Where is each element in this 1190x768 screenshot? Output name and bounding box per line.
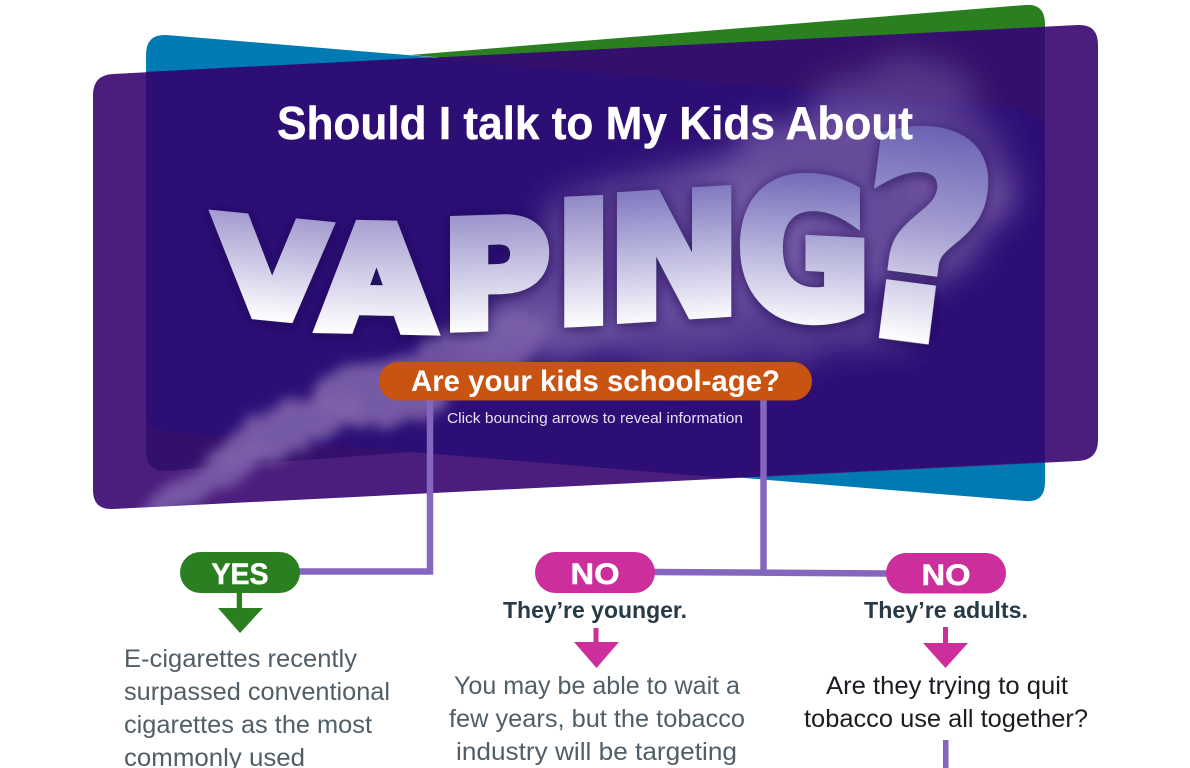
question pill: Are your kids school-age?	[411, 365, 780, 398]
yes body text: E-cigarettes recently	[124, 645, 358, 673]
younger body text: industry will be targeting	[456, 738, 737, 766]
instruction text: Click bouncing arrows to reveal information	[447, 410, 743, 427]
title: Should I talk to My Kids About	[277, 97, 913, 149]
VAPING? headline: N	[608, 158, 740, 359]
green back panel	[410, 5, 1045, 108]
younger body text	[449, 672, 745, 766]
adults question text: Are they trying to quit	[826, 672, 1068, 700]
adults question text: tobacco use all together?	[804, 705, 1088, 733]
yes branch	[124, 552, 390, 768]
no pill: adults: NO	[922, 559, 970, 592]
connector lines	[298, 400, 888, 574]
younger branch	[449, 552, 745, 766]
VAPING? headline: A	[320, 197, 433, 363]
VAPING? headline	[216, 74, 1011, 411]
adults question text	[804, 672, 1088, 733]
yes body text	[124, 645, 390, 768]
yes body text: surpassed conventional	[124, 678, 390, 706]
vapor smoke	[136, 59, 1015, 529]
overlap with blue panel	[146, 58, 1045, 478]
younger body text: few years, but the tobacco	[449, 705, 745, 733]
blue back panel	[146, 35, 1045, 501]
overlap with green panel	[146, 27, 1045, 471]
connector continuing down	[943, 740, 948, 768]
smoke trail	[138, 309, 546, 508]
banner background	[93, 5, 1098, 509]
VAPING? headline: P	[442, 189, 550, 363]
VAPING? headline: I	[553, 166, 614, 365]
adults branch	[804, 553, 1088, 768]
no pill: younger	[535, 552, 655, 593]
younger body text: You may be able to wait a	[454, 672, 740, 700]
they're younger label: They’re younger.	[503, 597, 687, 623]
arrow: younger	[574, 628, 619, 668]
arrow: adults	[923, 627, 968, 668]
they're adults label: They’re adults.	[864, 597, 1028, 623]
VAPING? headline: V	[216, 190, 328, 353]
VAPING? headline: G	[738, 142, 871, 362]
no pill: younger: NO	[570, 558, 620, 591]
no pill: adults	[886, 553, 1006, 594]
yes body text: cigarettes as the most	[124, 711, 372, 739]
yes pill	[180, 552, 300, 593]
purple front panel	[93, 25, 1098, 509]
arrow: yes	[218, 593, 263, 633]
yes pill: YES	[212, 558, 268, 591]
smoke cloud	[455, 59, 1015, 365]
VAPING? headline: ?	[837, 74, 1011, 411]
